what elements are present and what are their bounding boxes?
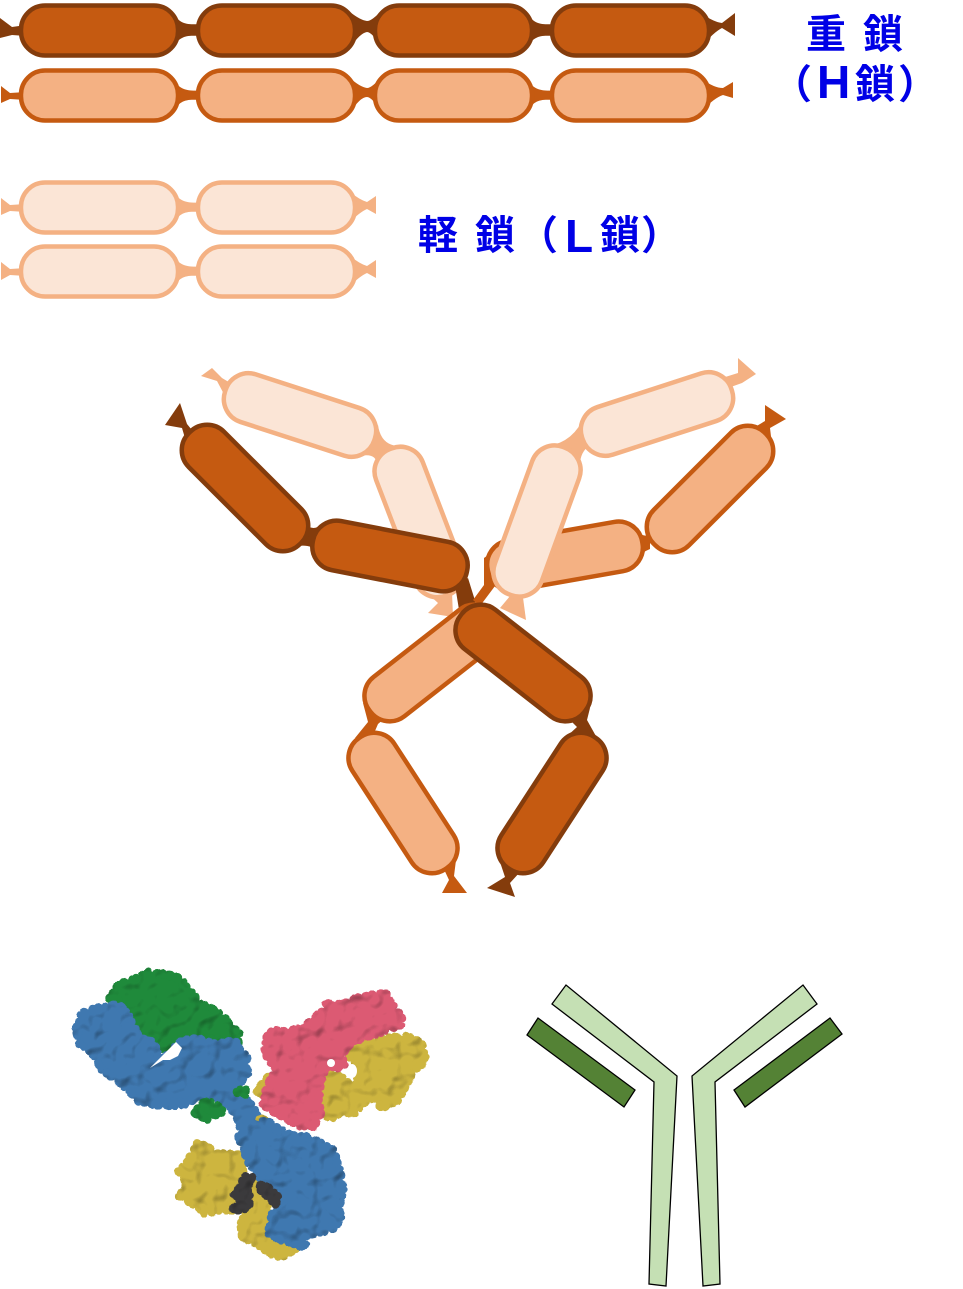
dark glycan	[233, 1177, 280, 1209]
heading: heavy chain: 鎖	[863, 13, 903, 57]
medium heavy chain, lower domain	[339, 724, 467, 882]
dark heavy chain, hinge domain	[446, 595, 600, 731]
heavy chain, medium row	[1, 70, 733, 120]
heavy chain linkers and tips	[165, 403, 786, 897]
heading: heavy chain: H	[817, 56, 850, 108]
heading: light chain: （	[518, 214, 558, 258]
green light chain, small fragments	[197, 1087, 248, 1118]
heading: light chain: ）	[641, 214, 681, 258]
dark green light chain, left	[527, 1018, 635, 1107]
yellow light chain, right arm	[321, 1037, 425, 1118]
yellow chain, small fragments	[259, 1078, 267, 1123]
heading: heavy chain	[772, 13, 938, 108]
palest light chain, upper left domain	[218, 367, 382, 463]
light green heavy chain, left	[552, 985, 677, 1286]
palest light chain, lower left domain	[368, 440, 470, 604]
blue heavy chain, lower lobe	[240, 1121, 343, 1248]
palest light chain, upper right domain	[575, 366, 739, 462]
heading: heavy chain: 重	[806, 13, 846, 57]
heading: light chain: 鎖	[600, 214, 640, 258]
dark heavy chain, middle left domain	[308, 516, 472, 596]
heading: light chain	[418, 210, 681, 262]
palest light chain, lower right domain	[487, 439, 587, 603]
heading: heavy chain: （	[772, 63, 812, 107]
light chain, upper row	[1, 182, 376, 232]
medium heavy chain, hinge domain	[355, 595, 509, 731]
medium heavy chain, upper right domain	[637, 416, 783, 562]
pink heavy chain, right arm	[263, 992, 400, 1128]
heading: light chain: 軽	[418, 214, 458, 258]
dark heavy chain, lower domain	[488, 724, 616, 882]
medium heavy chain, middle right domain	[483, 518, 647, 594]
blue heavy chain, upper arm	[77, 1003, 260, 1130]
yellow lower left lobe	[179, 1143, 244, 1212]
heading: heavy chain: ）	[898, 63, 938, 107]
holes in surface model	[150, 1042, 357, 1078]
heading: heavy chain: 鎖	[855, 63, 895, 107]
heading: light chain: L	[565, 210, 593, 262]
dark green light chain, right	[734, 1018, 842, 1107]
protein surface model	[77, 972, 425, 1257]
heavy chain, dark row	[0, 6, 735, 56]
antibody domain diagram	[165, 358, 786, 897]
light green heavy chain, right	[692, 985, 817, 1286]
dark heavy chain, upper left domain	[172, 415, 318, 561]
heading: light chain: 鎖	[475, 214, 515, 258]
light chain linkers and tips	[201, 358, 756, 620]
light chain, lower row	[1, 246, 376, 296]
simplified Y antibody diagram	[527, 985, 842, 1286]
green light chain, upper arm	[110, 972, 239, 1052]
yellow lower lobe	[241, 1178, 295, 1257]
